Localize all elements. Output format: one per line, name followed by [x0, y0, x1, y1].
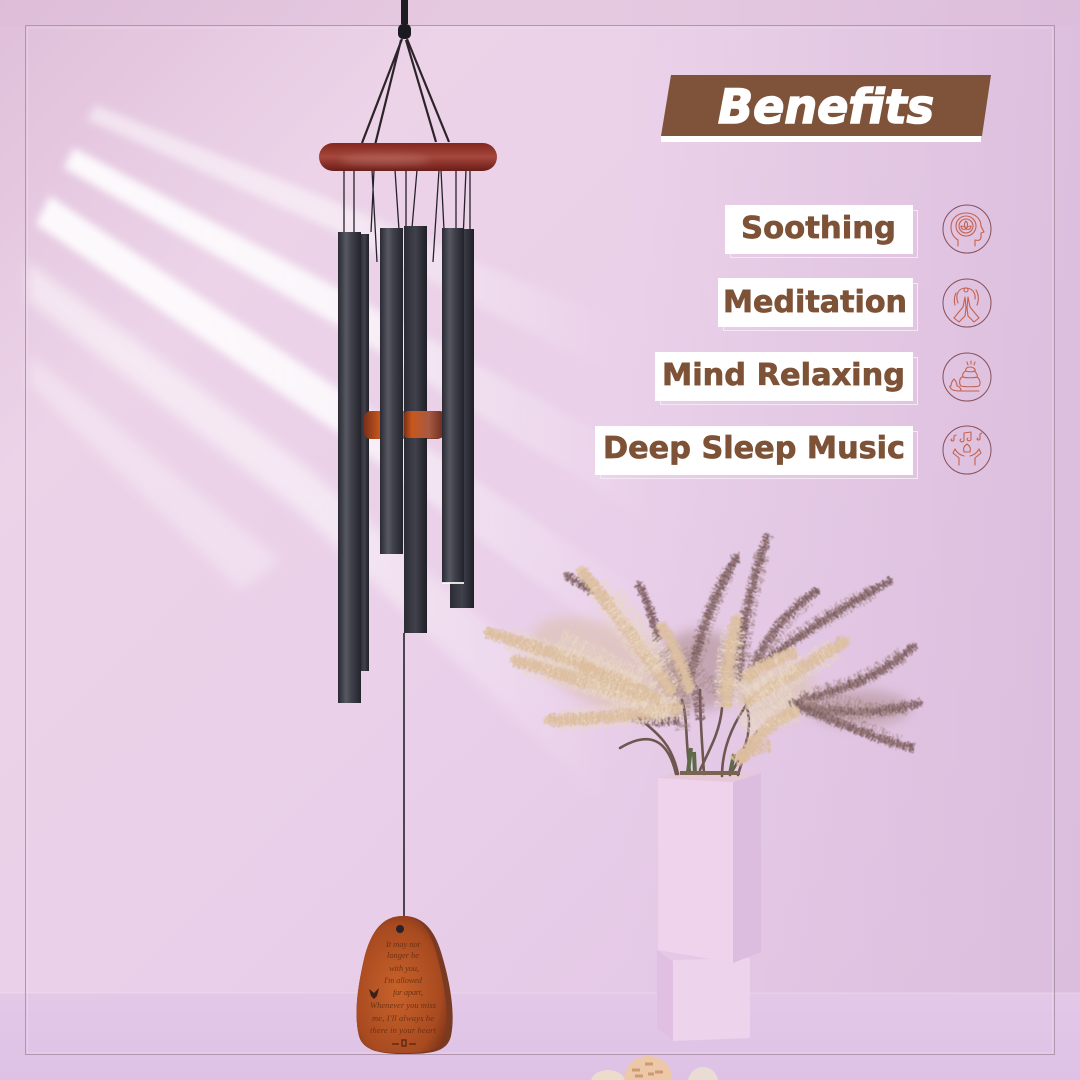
benefits heading: Benefits	[718, 80, 934, 135]
benefits heading	[661, 75, 991, 142]
icon: music notes over lotus figure	[943, 426, 991, 474]
engraved wooden sail: Whenever you miss	[370, 1000, 437, 1010]
small lower block	[657, 950, 750, 1041]
hanging cord and knot	[362, 0, 449, 145]
icon: spa stones and lotus	[943, 353, 991, 401]
benefit row: Soothing	[725, 205, 918, 258]
top wooden ring	[319, 143, 497, 171]
dark fronds	[565, 535, 921, 748]
wind chime	[319, 0, 497, 1054]
icon: praying hands	[943, 279, 991, 327]
tubes	[338, 226, 474, 703]
dried pampas plant	[487, 535, 921, 776]
centre wooden disc	[364, 411, 444, 439]
benefit row: Meditation	[718, 278, 918, 330]
engraved wooden sail: there in your heart	[370, 1025, 437, 1035]
engraved wooden sail: with you,	[389, 963, 419, 973]
benefit row: Meditation: Meditation	[723, 285, 907, 320]
engraved wooden sail	[357, 916, 453, 1054]
engraved wooden sail: longer be	[387, 950, 419, 960]
benefit row: Mind Relaxing	[655, 352, 918, 404]
strings to tubes	[344, 170, 470, 262]
floor	[0, 993, 1080, 1080]
light fronds	[487, 570, 847, 762]
engraved wooden sail: I'm allowed	[383, 975, 423, 985]
benefit row: Deep Sleep Music	[595, 426, 918, 478]
engraved wooden sail: It may not	[385, 939, 421, 949]
engraved wooden sail: me, I'll always be	[372, 1013, 434, 1023]
seashells	[591, 1051, 718, 1080]
engraved wooden sail: far apart,	[393, 987, 423, 997]
benefit row: Deep Sleep Music: Deep Sleep Music	[603, 431, 905, 466]
vase stack	[657, 772, 761, 1041]
benefit row: Mind Relaxing: Mind Relaxing	[662, 358, 905, 393]
stems	[620, 690, 758, 776]
tall vase	[658, 772, 761, 963]
light rays	[28, 105, 660, 800]
foliage shading	[516, 596, 910, 740]
long cord	[403, 633, 405, 917]
fronds	[487, 535, 921, 762]
benefit row: Soothing: Soothing	[741, 211, 896, 246]
icon: head with lotus	[943, 205, 991, 253]
